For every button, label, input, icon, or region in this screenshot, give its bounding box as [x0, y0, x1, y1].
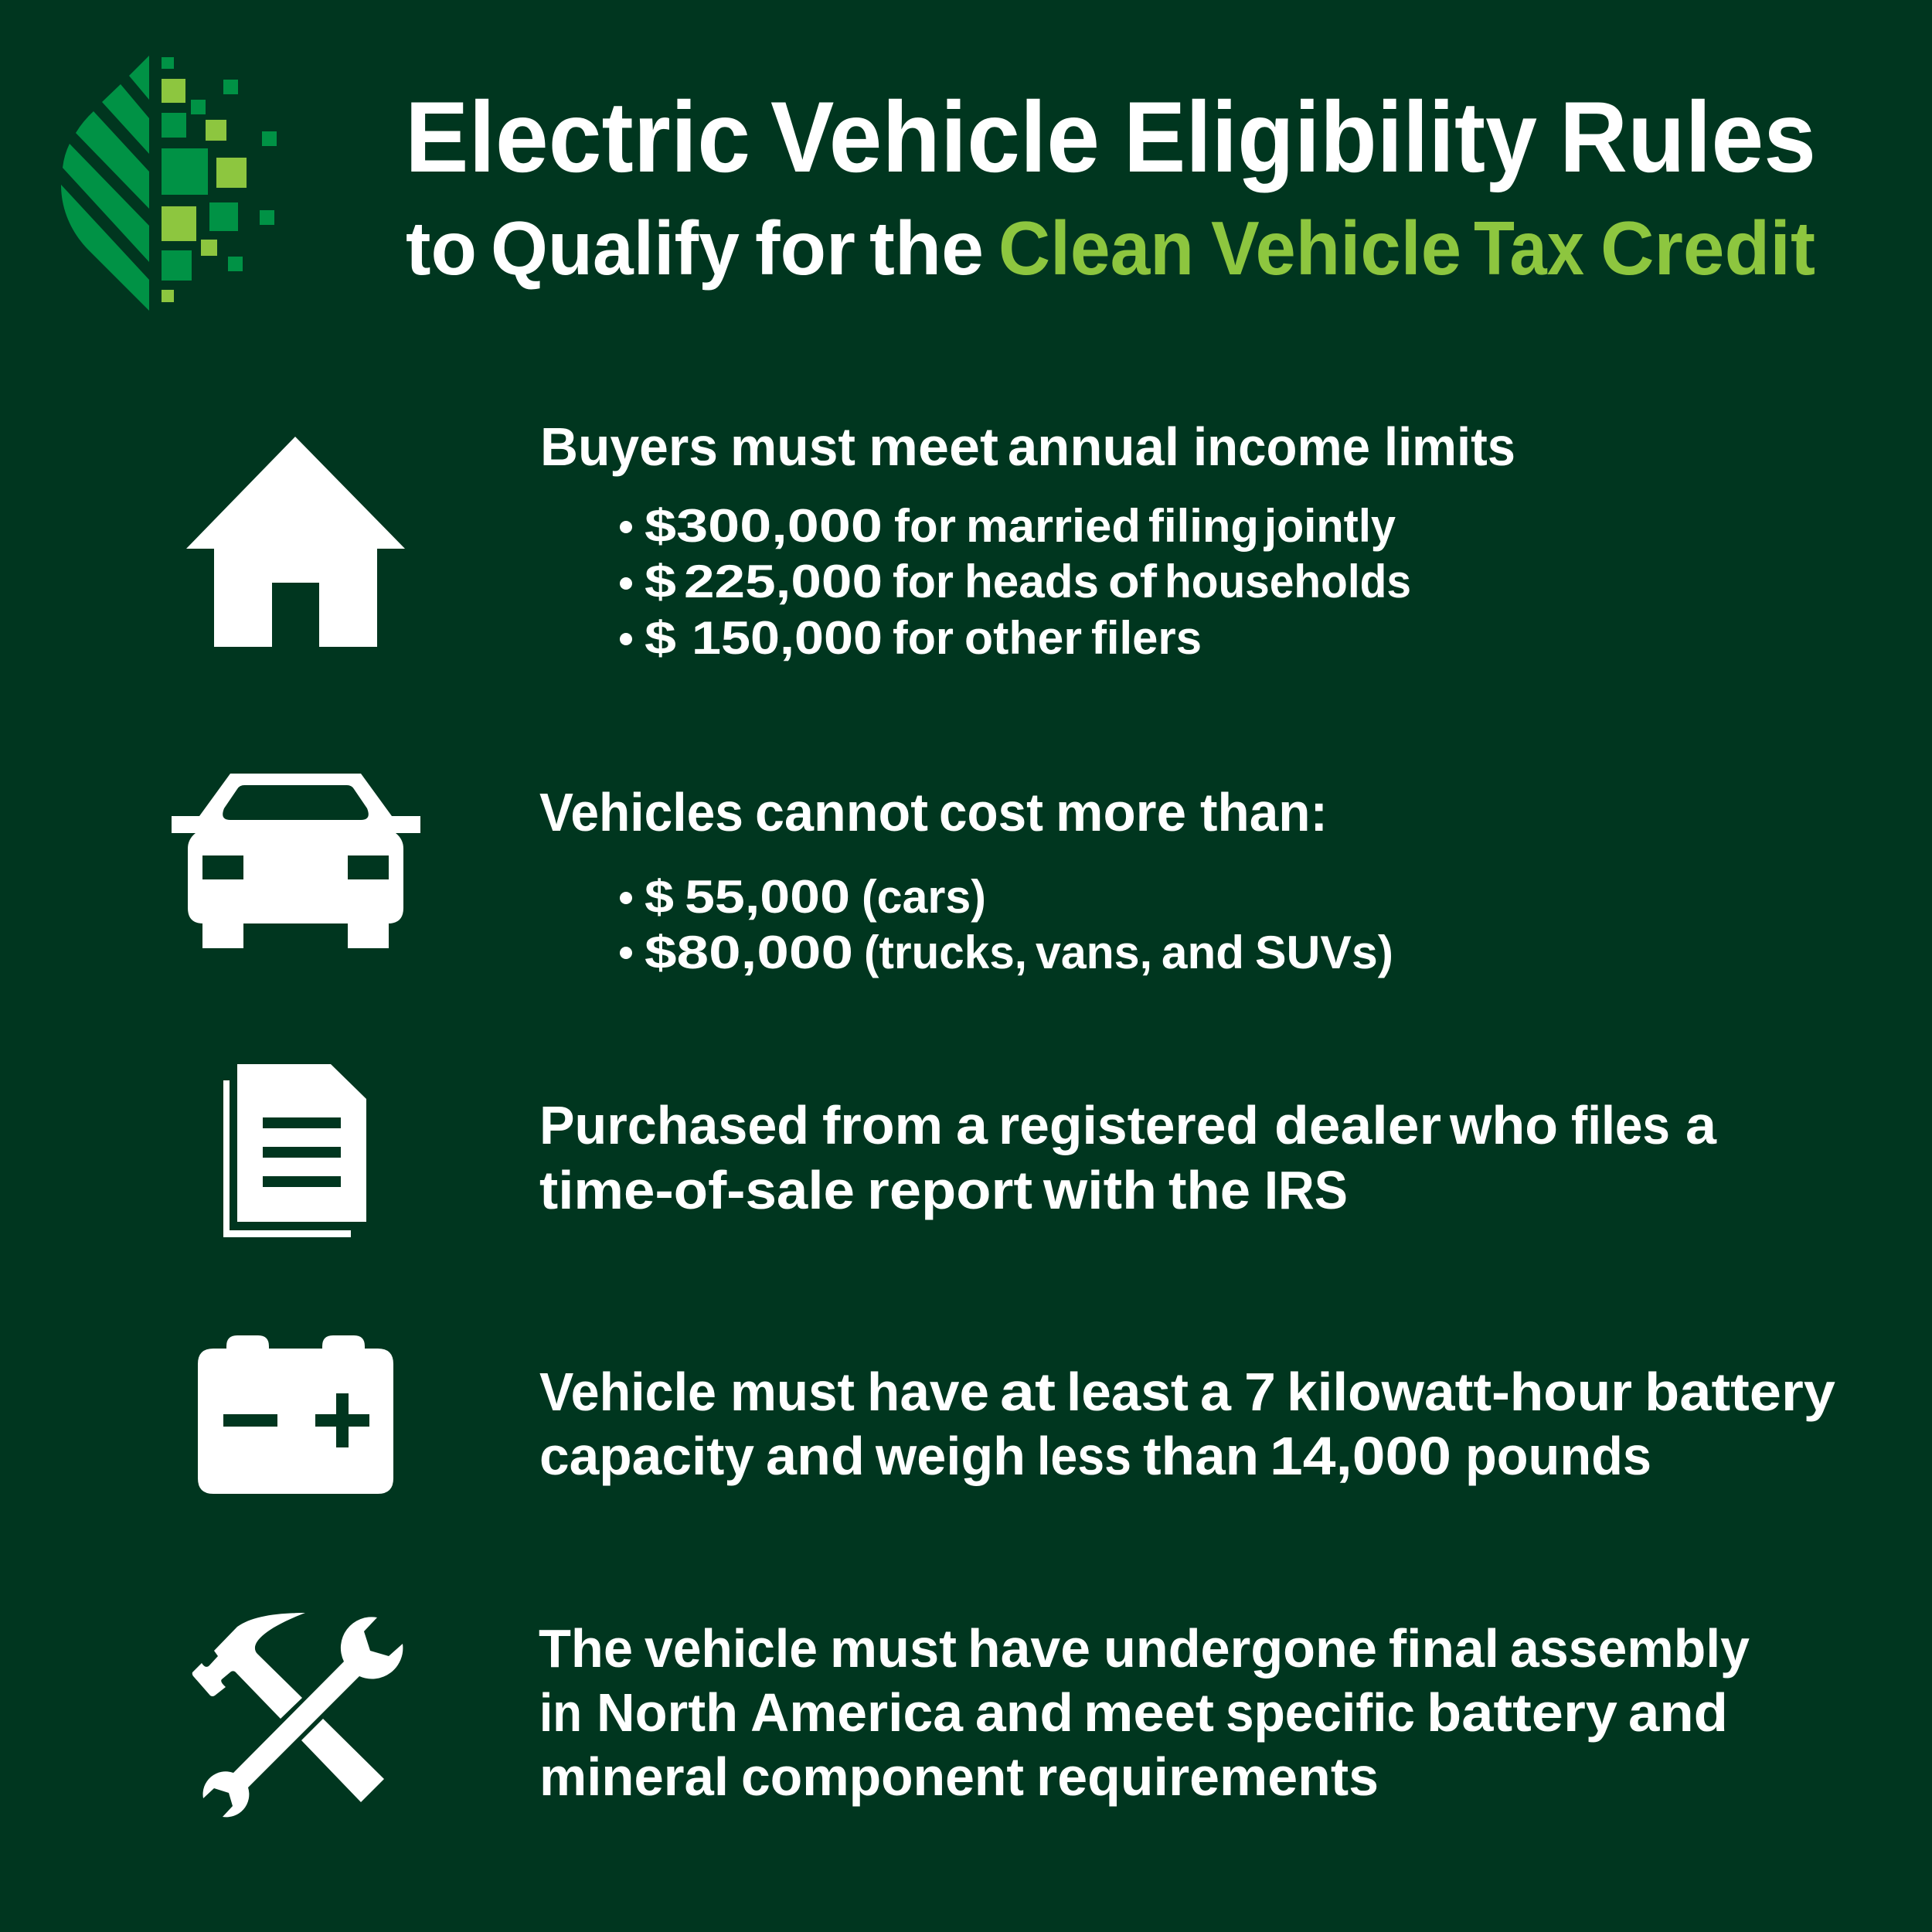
icon: hammer and wrench	[192, 1613, 403, 1817]
text block: battery capacity: kilowatt-hour	[1287, 1362, 1632, 1422]
heading: income: income	[1193, 417, 1370, 477]
text block: vehicle price	[539, 782, 1393, 978]
text block: battery capacity: and	[766, 1426, 865, 1486]
text block: assembly: component	[741, 1747, 1024, 1807]
bullet list: income: filers	[1091, 612, 1202, 664]
bullet list: income	[620, 500, 1411, 664]
heading: price: more	[1056, 782, 1186, 842]
text block: dealer: a	[1685, 1095, 1717, 1155]
text block: assembly: must	[830, 1618, 957, 1679]
text block: assembly: specific	[1226, 1682, 1415, 1743]
bullet list: income: for	[893, 556, 954, 607]
text block: battery capacity: Vehicle	[539, 1362, 716, 1422]
bullet list: income: filing	[1148, 500, 1259, 552]
bullet list: income: jointly	[1264, 500, 1396, 552]
bullet list: income: $	[645, 556, 676, 607]
text block: battery capacity: than	[1143, 1426, 1259, 1486]
title: Electric	[405, 80, 750, 193]
heading: income: limits	[1384, 417, 1515, 477]
text block: battery capacity	[539, 1362, 1835, 1486]
title	[405, 80, 1816, 193]
text block: dealer: IRS	[1264, 1160, 1348, 1220]
bullet list: price: $	[645, 871, 674, 923]
icon: house	[186, 437, 405, 647]
bullet list: income: households	[1165, 556, 1411, 607]
text block: dealer: files	[1571, 1095, 1670, 1155]
subtitle green part: Clean	[998, 206, 1194, 291]
text block: battery capacity: 7	[1244, 1362, 1276, 1422]
bullet list: income: $300,000	[645, 500, 883, 552]
heading: price: than:	[1200, 782, 1328, 842]
title: Rules	[1560, 80, 1816, 193]
bullet list: income: of	[1108, 556, 1158, 607]
bullet list: income: other	[964, 612, 1082, 664]
text block: battery capacity: a	[1200, 1362, 1232, 1422]
bullet list: price	[620, 871, 1393, 978]
subtitle green part: Vehicle	[1211, 206, 1461, 291]
bullet list: income: heads	[964, 556, 1099, 607]
text block: assembly: vehicle	[645, 1618, 818, 1679]
icon: car	[172, 774, 420, 948]
text block: income limits	[540, 417, 1515, 664]
text block: dealer	[539, 1095, 1717, 1220]
hammer	[192, 1613, 384, 1802]
text block: assembly: battery	[1427, 1682, 1617, 1743]
text block: assembly: and	[1628, 1682, 1728, 1743]
text block: battery capacity: weigh	[875, 1426, 1026, 1486]
bullet list: income: 150,000	[692, 612, 883, 664]
heading: price	[539, 782, 1328, 842]
text block: dealer: the	[1168, 1160, 1250, 1220]
text block: dealer: a	[956, 1095, 988, 1155]
text block: assembly: final	[1389, 1618, 1499, 1679]
heading: income: Buyers	[540, 417, 718, 477]
heading: price: cost	[939, 782, 1043, 842]
heading: income: must	[730, 417, 855, 477]
text block: dealer: from	[822, 1095, 943, 1155]
text block: battery capacity: 14,000	[1270, 1426, 1451, 1486]
text block: battery capacity: less	[1037, 1426, 1131, 1486]
heading: price: cannot	[755, 782, 928, 842]
text block: assembly: meet	[1083, 1682, 1214, 1743]
bullet list: price: SUVs)	[1255, 927, 1393, 978]
bullet list: price: (trucks,	[864, 927, 1027, 978]
text block: assembly: North	[597, 1682, 738, 1743]
text block: assembly: mineral	[539, 1747, 729, 1807]
subtitle white part: the	[869, 206, 984, 291]
leaf stripes	[61, 56, 149, 311]
bullet list: price: and	[1162, 927, 1244, 978]
subtitle white part: Qualify	[491, 206, 740, 291]
bullet list: price: 55,000	[685, 871, 850, 923]
subtitle green part	[998, 206, 1815, 291]
icon: document	[223, 1064, 366, 1237]
text block: assembly: in	[539, 1682, 582, 1743]
text block: dealer: time-of-sale	[539, 1160, 855, 1220]
heading: income: annual	[1008, 417, 1179, 477]
bullet list: income: for	[894, 500, 956, 552]
subtitle	[406, 206, 1815, 291]
heading: income: meet	[869, 417, 998, 477]
subtitle white part: for	[755, 206, 855, 291]
bullet list: income: for	[893, 612, 954, 664]
text block: dealer: with	[1043, 1160, 1157, 1220]
text block: dealer: who	[1449, 1095, 1558, 1155]
bullet list: price: $80,000	[645, 927, 853, 978]
title: Vehicle	[770, 80, 1100, 193]
text block: battery capacity: battery	[1645, 1362, 1835, 1422]
text block: battery capacity: have	[867, 1362, 989, 1422]
text block: battery capacity: pounds	[1465, 1426, 1651, 1486]
light pixels	[162, 79, 247, 302]
icon: battery	[198, 1335, 393, 1494]
text block: dealer: report	[867, 1160, 1032, 1220]
text block: assembly: The	[539, 1618, 633, 1679]
text block: dealer: Purchased	[539, 1095, 809, 1155]
text block: battery capacity: capacity	[539, 1426, 754, 1486]
text block: assembly: undergone	[1104, 1618, 1377, 1679]
bullet list: price: vans,	[1036, 927, 1152, 978]
heading: price: Vehicles	[539, 782, 743, 842]
subtitle green part: Tax	[1474, 206, 1584, 291]
subtitle green part: Credit	[1600, 206, 1815, 291]
text block: assembly	[539, 1618, 1750, 1807]
bullet list: price: (cars)	[862, 871, 986, 923]
subtitle white part	[406, 206, 984, 291]
wrench	[203, 1617, 403, 1817]
title: Eligibility	[1124, 80, 1537, 193]
logo: leaf with pixels	[61, 56, 277, 311]
text block: battery capacity: must	[730, 1362, 855, 1422]
text block: assembly: have	[968, 1618, 1090, 1679]
bullet list: income: 225,000	[684, 556, 883, 607]
bullet list: income: $	[645, 612, 676, 664]
bullet list: income: married	[966, 500, 1141, 552]
text block: assembly: America	[750, 1682, 964, 1743]
text block: battery capacity: least	[1066, 1362, 1189, 1422]
text block: assembly: assembly	[1510, 1618, 1750, 1679]
heading: income	[540, 417, 1515, 477]
text block: assembly: and	[975, 1682, 1073, 1743]
dark pixels	[162, 57, 277, 281]
text block: battery capacity: at	[1000, 1362, 1056, 1422]
text block: dealer: registered	[998, 1095, 1259, 1155]
subtitle white part: to	[406, 206, 477, 291]
text block: assembly: requirements	[1036, 1747, 1379, 1807]
text block: dealer: dealer	[1274, 1095, 1441, 1155]
